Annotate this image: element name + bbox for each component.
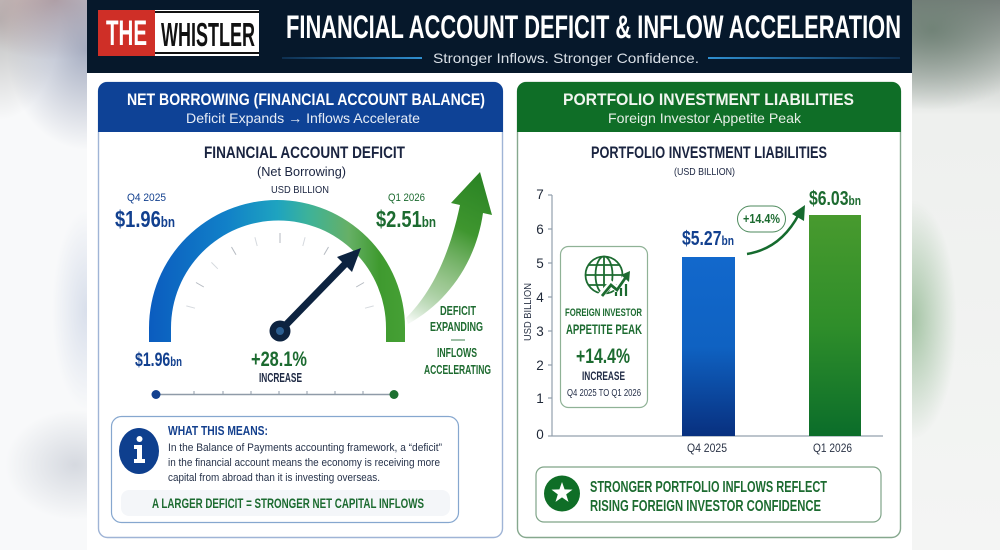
y axis: 7 — [536, 187, 544, 202]
tagline: Stronger Inflows. Stronger Confidence. — [433, 50, 699, 66]
y axis: 6 — [536, 222, 544, 237]
side label: deficit expanding, inflows accelerating — [424, 304, 491, 377]
y axis: 5 — [536, 256, 544, 271]
callout takeaway — [121, 490, 450, 516]
card label: FOREIGN INVESTOR — [565, 307, 642, 319]
blurred background: left side — [0, 0, 87, 550]
callout: what this means — [112, 416, 458, 522]
callout body — [168, 442, 442, 484]
callout body: capital from abroad than it is investing overseas. — [168, 472, 380, 484]
side label: deficit expanding, inflows accelerating: EXPANDING — [430, 320, 483, 334]
side label: deficit expanding, inflows accelerating: DEFICIT — [440, 304, 476, 318]
bar: Q4 2025 — [682, 257, 735, 436]
chart heading — [591, 144, 827, 178]
axis label: Q4 2025: Q4 2025 — [687, 443, 727, 455]
bar label: 5.27: $5.27bn — [682, 228, 734, 250]
y axis: 4 — [536, 290, 544, 305]
panel header: portfolio: PORTFOLIO INVESTMENT LIABILITIES — [563, 90, 854, 109]
side label: deficit expanding, inflows accelerating: INFLOWS — [437, 346, 477, 360]
callout text — [590, 479, 827, 515]
gauge heading: (Net Borrowing) — [257, 165, 346, 179]
side label: deficit expanding, inflows accelerating: ACCELERATING — [424, 363, 491, 377]
gauge heading: FINANCIAL ACCOUNT DEFICIT — [204, 144, 405, 162]
value: Q1 2026: Q1 2026 — [388, 192, 425, 204]
callout text: STRONGER PORTFOLIO INFLOWS REFLECT — [590, 479, 827, 496]
logo: The Whistler: THE — [106, 14, 147, 53]
logo: The Whistler: WHISTLER — [161, 16, 255, 53]
panel: net borrowing — [98, 82, 503, 538]
panel header: net borrowing: Deficit Expands → Inflows Accelerate — [186, 110, 420, 126]
axis label: Q1 2026: Q1 2026 — [813, 443, 852, 455]
bar label: 6.03: $6.03bn — [809, 188, 861, 210]
gauge arc — [149, 200, 405, 342]
panel header: portfolio: Foreign Investor Appetite Peak — [608, 110, 802, 126]
panel header: net borrowing: NET BORROWING (FINANCIAL ACCOUNT BALANCE) — [127, 90, 485, 109]
card label: APPETITE PEAK — [566, 321, 642, 337]
gauge change value — [251, 348, 307, 385]
gauge heading — [204, 144, 405, 196]
y axis: 1 — [536, 391, 544, 406]
info card: foreign investor appetite peak — [560, 246, 648, 408]
value: Q4 2025: Q4 2025 — [127, 192, 166, 204]
icon: info — [119, 428, 159, 474]
card increase note — [567, 371, 641, 399]
card label — [565, 307, 642, 368]
y axis: 3 — [536, 324, 544, 339]
callout body: In the Balance of Payments accounting framework, a “deficit” — [168, 442, 442, 454]
y axis: 0 — [536, 427, 544, 442]
value: Q1 2026 — [376, 192, 436, 232]
value: Q4 2025 — [115, 192, 175, 232]
icon: star badge — [544, 476, 580, 512]
panel header: net borrowing — [98, 82, 503, 132]
blurred background: right side — [912, 0, 1000, 550]
bar chart — [523, 187, 883, 455]
big rising arrow — [406, 172, 492, 324]
chart heading: PORTFOLIO INVESTMENT LIABILITIES — [591, 144, 827, 162]
panel header: portfolio — [517, 82, 901, 132]
callout text: RISING FOREIGN INVESTOR CONFIDENCE — [590, 498, 821, 515]
panel: portfolio investment liabilities — [517, 82, 901, 538]
bar: Q1 2026 — [809, 215, 861, 436]
value: Q1 2026: $2.51bn — [376, 206, 436, 232]
gauge ticks — [186, 233, 374, 308]
callout takeaway: A LARGER DEFICIT = STRONGER NET CAPITAL INFLOWS — [152, 495, 424, 511]
card increase note: Q4 2025 TO Q1 2026 — [567, 388, 641, 399]
callout: stronger portfolio inflows — [536, 467, 881, 522]
y axis — [523, 187, 883, 442]
timeline scale — [152, 390, 398, 399]
gauge heading: USD BILLION — [271, 185, 329, 196]
y axis: USD BILLION — [523, 283, 534, 341]
gauge change value: INCREASE — [259, 371, 302, 385]
callout heading: WHAT THIS MEANS: — [168, 424, 268, 438]
growth pill — [738, 206, 786, 232]
header band — [87, 0, 912, 73]
value: Q4 2025: $1.96bn — [115, 206, 175, 232]
growth arrow — [747, 205, 805, 254]
card label: +14.4% — [576, 345, 630, 368]
icon: globe with trend arrow — [586, 256, 630, 296]
card increase note: INCREASE — [582, 371, 625, 383]
y axis: 2 — [536, 358, 544, 373]
growth pill: +14.4% — [743, 212, 780, 226]
gauge needle — [270, 248, 361, 342]
callout body: in the financial account means the economy is receiving more — [168, 457, 440, 469]
gauge change value: +28.1% — [251, 348, 307, 371]
logo: The Whistler — [98, 10, 259, 56]
chart heading: (USD BILLION) — [674, 167, 735, 178]
gauge start value: $1.96bn — [135, 350, 182, 371]
